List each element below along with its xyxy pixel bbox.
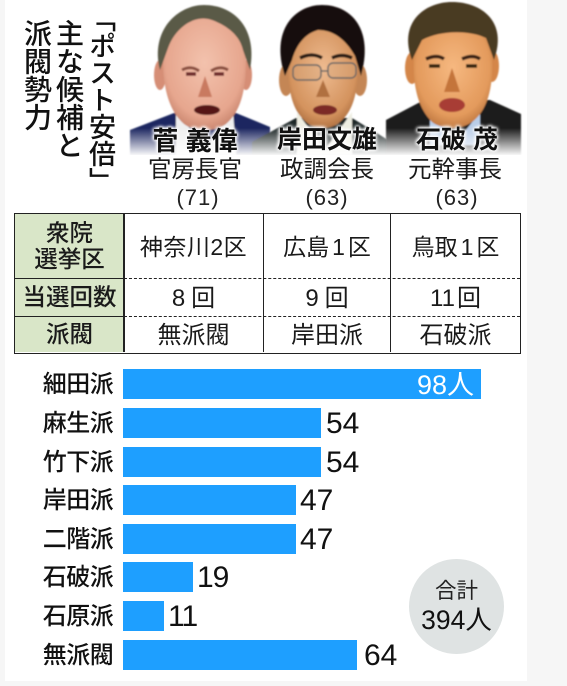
wins: Kishida: 9	[305, 285, 319, 312]
age: (71)	[176, 185, 220, 210]
row: Kishida faction: 岸田派	[43, 487, 113, 514]
name: 石破 茂	[416, 126, 498, 154]
row: Ishihara: 石原派	[43, 603, 113, 630]
district: Kishida: 広島 区	[283, 234, 371, 260]
portrait: Kishida	[252, 5, 388, 165]
district: Suga: 神奈川2区	[140, 234, 247, 260]
row: Takeshita: 竹下派	[43, 449, 113, 476]
wins: Ishiba: 回	[457, 285, 481, 312]
row: Nikai: 二階派	[43, 526, 113, 553]
faction: Suga: 無派閥	[158, 322, 230, 349]
row: independents: 64	[364, 639, 397, 672]
title line 2: 主な候補と	[53, 19, 84, 159]
row: Nikai	[43, 523, 333, 556]
row header: district: 選挙区	[34, 246, 105, 272]
total value: 394人	[421, 605, 492, 635]
bar chart: faction sizes	[43, 369, 481, 672]
district: Ishiba: 鳥取 区	[412, 234, 499, 260]
row: independents: 無派閥	[43, 642, 113, 669]
name: 岸田文雄	[277, 126, 377, 154]
wins: Suga	[172, 285, 215, 312]
photo fade	[128, 128, 524, 156]
horizontal rules	[15, 278, 124, 279]
wins: Kishida: 回	[325, 285, 349, 312]
role: 元幹事長	[408, 156, 502, 182]
row header: district: 衆院	[46, 220, 93, 246]
portrait: Suga	[130, 5, 270, 165]
row: Kishida faction	[43, 484, 333, 517]
row: Ishihara	[43, 600, 197, 633]
row header: faction: 派閥	[46, 321, 93, 347]
wins: Suga: 8	[172, 285, 185, 312]
title line 3: 派閥勢力	[21, 19, 52, 131]
row header: wins: 当選回数	[22, 284, 116, 310]
wins: Ishiba	[430, 285, 481, 312]
row header: district	[15, 214, 124, 278]
row: Aso	[43, 407, 359, 440]
row: Hosoda	[43, 369, 481, 400]
district: Kishida: 1	[332, 234, 345, 260]
district: Ishiba: 1	[461, 234, 473, 260]
candidate: Ishiba	[408, 122, 502, 210]
portrait: Ishiba	[386, 2, 521, 165]
row header: faction	[15, 317, 124, 352]
faction: Kishida: 岸田派	[291, 322, 363, 349]
row: Hosoda: 細田派	[43, 371, 113, 398]
row: Takeshita	[43, 446, 359, 479]
title line 1: 「ポスト安倍」	[85, 5, 115, 194]
row: Aso: 54	[326, 407, 359, 440]
wins: Ishiba: 11	[430, 285, 455, 312]
row: Ishihara: 11	[168, 600, 197, 633]
name: 菅 義偉	[152, 126, 238, 156]
row: Ishiba faction	[43, 561, 228, 594]
title	[21, 5, 116, 194]
row: independents	[43, 639, 397, 672]
wins: Kishida	[305, 285, 349, 312]
row: Aso: 麻生派	[43, 410, 113, 437]
candidate: Suga	[148, 124, 242, 210]
total badge	[409, 559, 504, 654]
portraits	[129, 0, 522, 155]
comparison table	[14, 213, 521, 354]
total label: 合計	[435, 579, 478, 603]
row: Ishiba faction: 石破派	[43, 564, 113, 591]
row: Nikai: 47	[300, 523, 333, 556]
row: Hosoda: 98人	[417, 370, 474, 400]
role: 政調会長	[280, 156, 374, 182]
row: Kishida faction: 47	[300, 484, 333, 517]
row header: wins	[15, 279, 124, 316]
candidate: Kishida	[275, 122, 379, 210]
role: 官房長官	[148, 156, 242, 182]
faction: Ishiba: 石破派	[420, 322, 492, 349]
row: Ishiba faction: 19	[197, 561, 228, 594]
vertical rules	[123, 214, 124, 352]
age: (63)	[305, 185, 349, 210]
age: (63)	[435, 185, 479, 210]
row: Takeshita: 54	[326, 446, 359, 479]
wins: Suga: 回	[191, 285, 215, 312]
